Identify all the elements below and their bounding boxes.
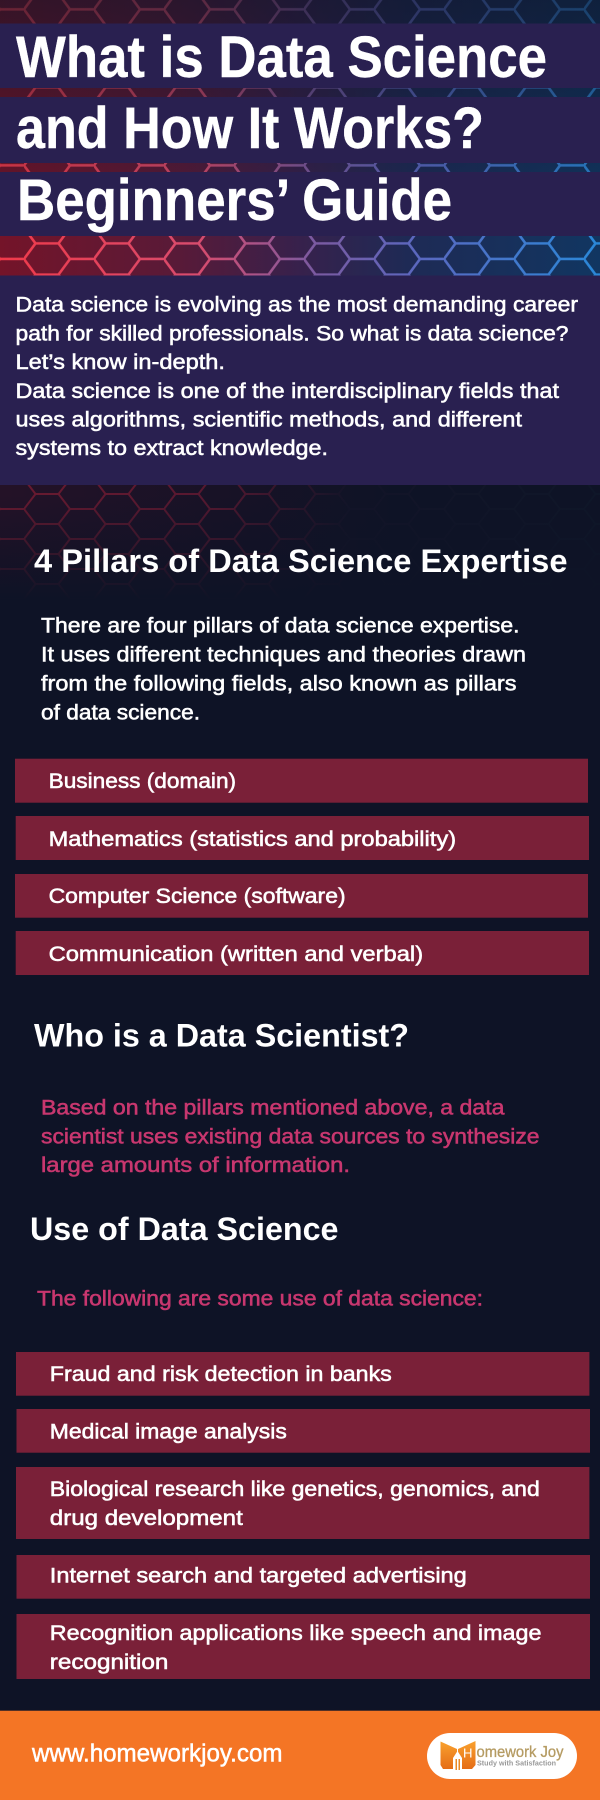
panel: introduction: Data science is one of the interdisciplinary fields that [16,380,559,403]
icon: open book [440,1741,476,1770]
text block: data scientist description: large amounts of information. [41,1154,350,1177]
panel: introduction: path for skilled professionals. So what is data science? [16,323,568,346]
panel: introduction: Let’s know in-depth. [16,351,225,374]
list item: medical image analysis: Medical image analysis [50,1421,287,1444]
title [0,24,600,236]
panel: introduction: systems to extract knowledge. [16,437,328,460]
text block: pillars description: There are four pillars of data science expertise. [41,615,520,638]
text block: pillars description: It uses different techniques and theories drawn [41,644,526,667]
heading: who is a data scientist: Who is a Data Scientist? [34,1018,409,1054]
text block: data scientist description [41,1096,540,1177]
logo [427,1733,577,1779]
list item: biological research [16,1467,589,1539]
icon: open book: H [463,1746,472,1760]
footer url: www.homeworkjoy.com [31,1740,282,1768]
list item: internet search [16,1555,590,1599]
text block: data scientist description: scientist uses existing data sources to synthesize [41,1125,540,1148]
list item: communication: Communication (written and verbal) [49,943,423,966]
panel: introduction: uses algorithms, scientific methods, and different [16,409,522,432]
list item: internet search: Internet search and targeted advertising [50,1565,467,1588]
text block: data scientist description: Based on the pillars mentioned above, a data [41,1096,505,1119]
hexagon pattern background: dark section [0,485,342,590]
logo: omework Joy [476,1744,564,1761]
list item: fraud detection: Fraud and risk detection in banks [50,1363,392,1386]
title: and How It Works? [16,96,484,161]
heading: use of data science: Use of Data Science [30,1211,338,1247]
panel: introduction [0,276,600,485]
list item: biological research: Biological research like genetics, genomics, and [50,1478,540,1501]
list item: recognition applications: Recognition applications like speech and image [50,1622,542,1645]
list item: mathematics [16,816,589,860]
list item: communication [16,931,589,975]
text block: use intro: The following are some use of data science: [37,1288,483,1311]
list item: recognition applications [16,1614,590,1679]
list item: computer science [15,874,588,918]
heading: 4 pillars: 4 Pillars of Data Science Expertise [34,543,568,579]
logo: Study with Satisfaction [477,1758,556,1767]
text block: pillars description: from the following fields, also known as pillars [41,673,516,696]
panel: introduction: Data science is evolving as the most demanding career [16,294,578,317]
title: What is Data Science [16,25,547,90]
list item: fraud detection [16,1352,589,1396]
list item: business [15,759,588,803]
list item: recognition applications: recognition [50,1651,168,1674]
list item: mathematics: Mathematics (statistics and probability) [49,828,456,851]
text block: pillars description [41,615,526,724]
list item: medical image analysis [16,1409,590,1453]
footer [0,1711,600,1800]
list item: business: Business (domain) [49,770,236,793]
text block: pillars description: of data science. [41,701,200,724]
list item: biological research: drug development [50,1507,243,1530]
title: Beginners’ Guide [17,168,452,233]
list item: computer science: Computer Science (software) [49,885,346,908]
hexagon pattern background: header [0,0,600,276]
